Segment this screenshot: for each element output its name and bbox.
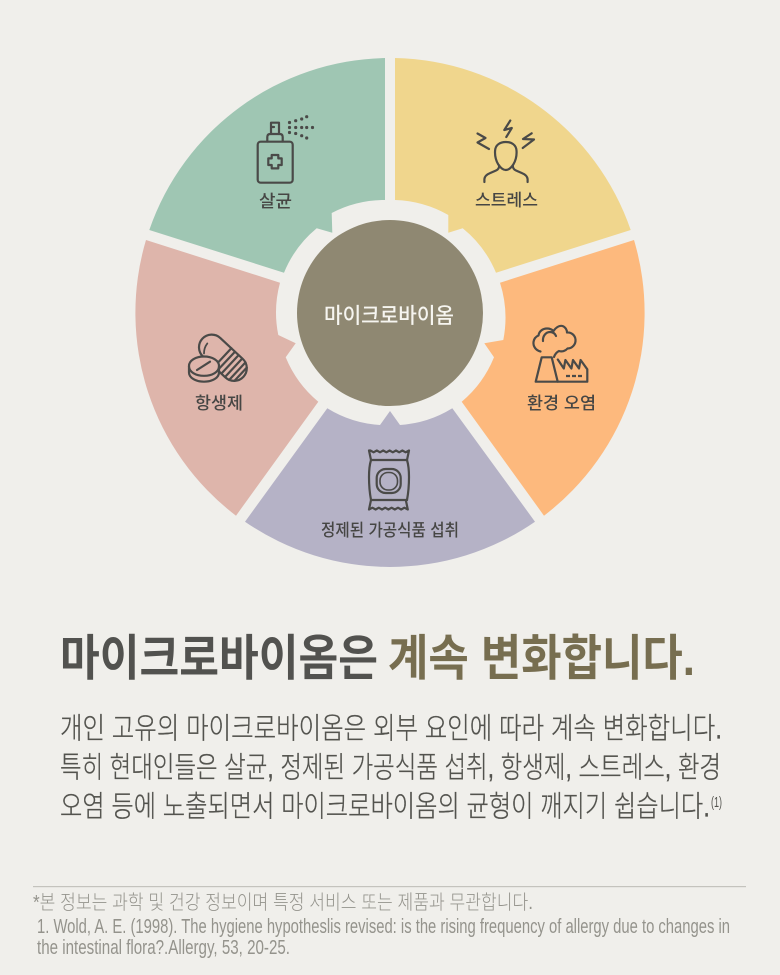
panel: antibiotics [135,240,318,516]
center circle: microbiome [297,220,483,406]
panel: stress [395,58,631,273]
title [60,632,695,686]
label: stress: 스트레스 [475,191,538,210]
label: processed food intake: 정제된 가공식품 섭취 [321,521,459,540]
footnote: *본 정보는 과학 및 건강 정보이며 특정 서비스 또는 제품과 무관합니다. [33,891,533,914]
title: 계속 변화합니다. [388,632,695,686]
footer divider [33,886,746,887]
label: environmental pollution: 환경 오염 [527,394,596,413]
panel: environmental pollution [462,240,645,516]
title: 마이크로바이옴은 [60,632,378,686]
label: sterilization: 살균 [259,192,292,211]
body text: (1) [711,794,722,811]
body text [60,712,722,824]
icon: snack bag [369,450,409,510]
footnote [33,891,730,959]
icon: factory and smoke [533,326,587,382]
icon: pills [189,329,252,386]
label: antibiotics: 항생제 [195,394,243,413]
label: microbiome: 마이크로바이옴 [324,304,454,328]
icon: stressed person [478,120,534,182]
wheel diagram [135,58,645,567]
icon: spray bottle [258,115,314,183]
footnote: the intestinal flora?.Allergy, 53, 20-25. [37,937,290,959]
panel: processed food [245,408,535,567]
panel: sterilization [149,58,385,273]
